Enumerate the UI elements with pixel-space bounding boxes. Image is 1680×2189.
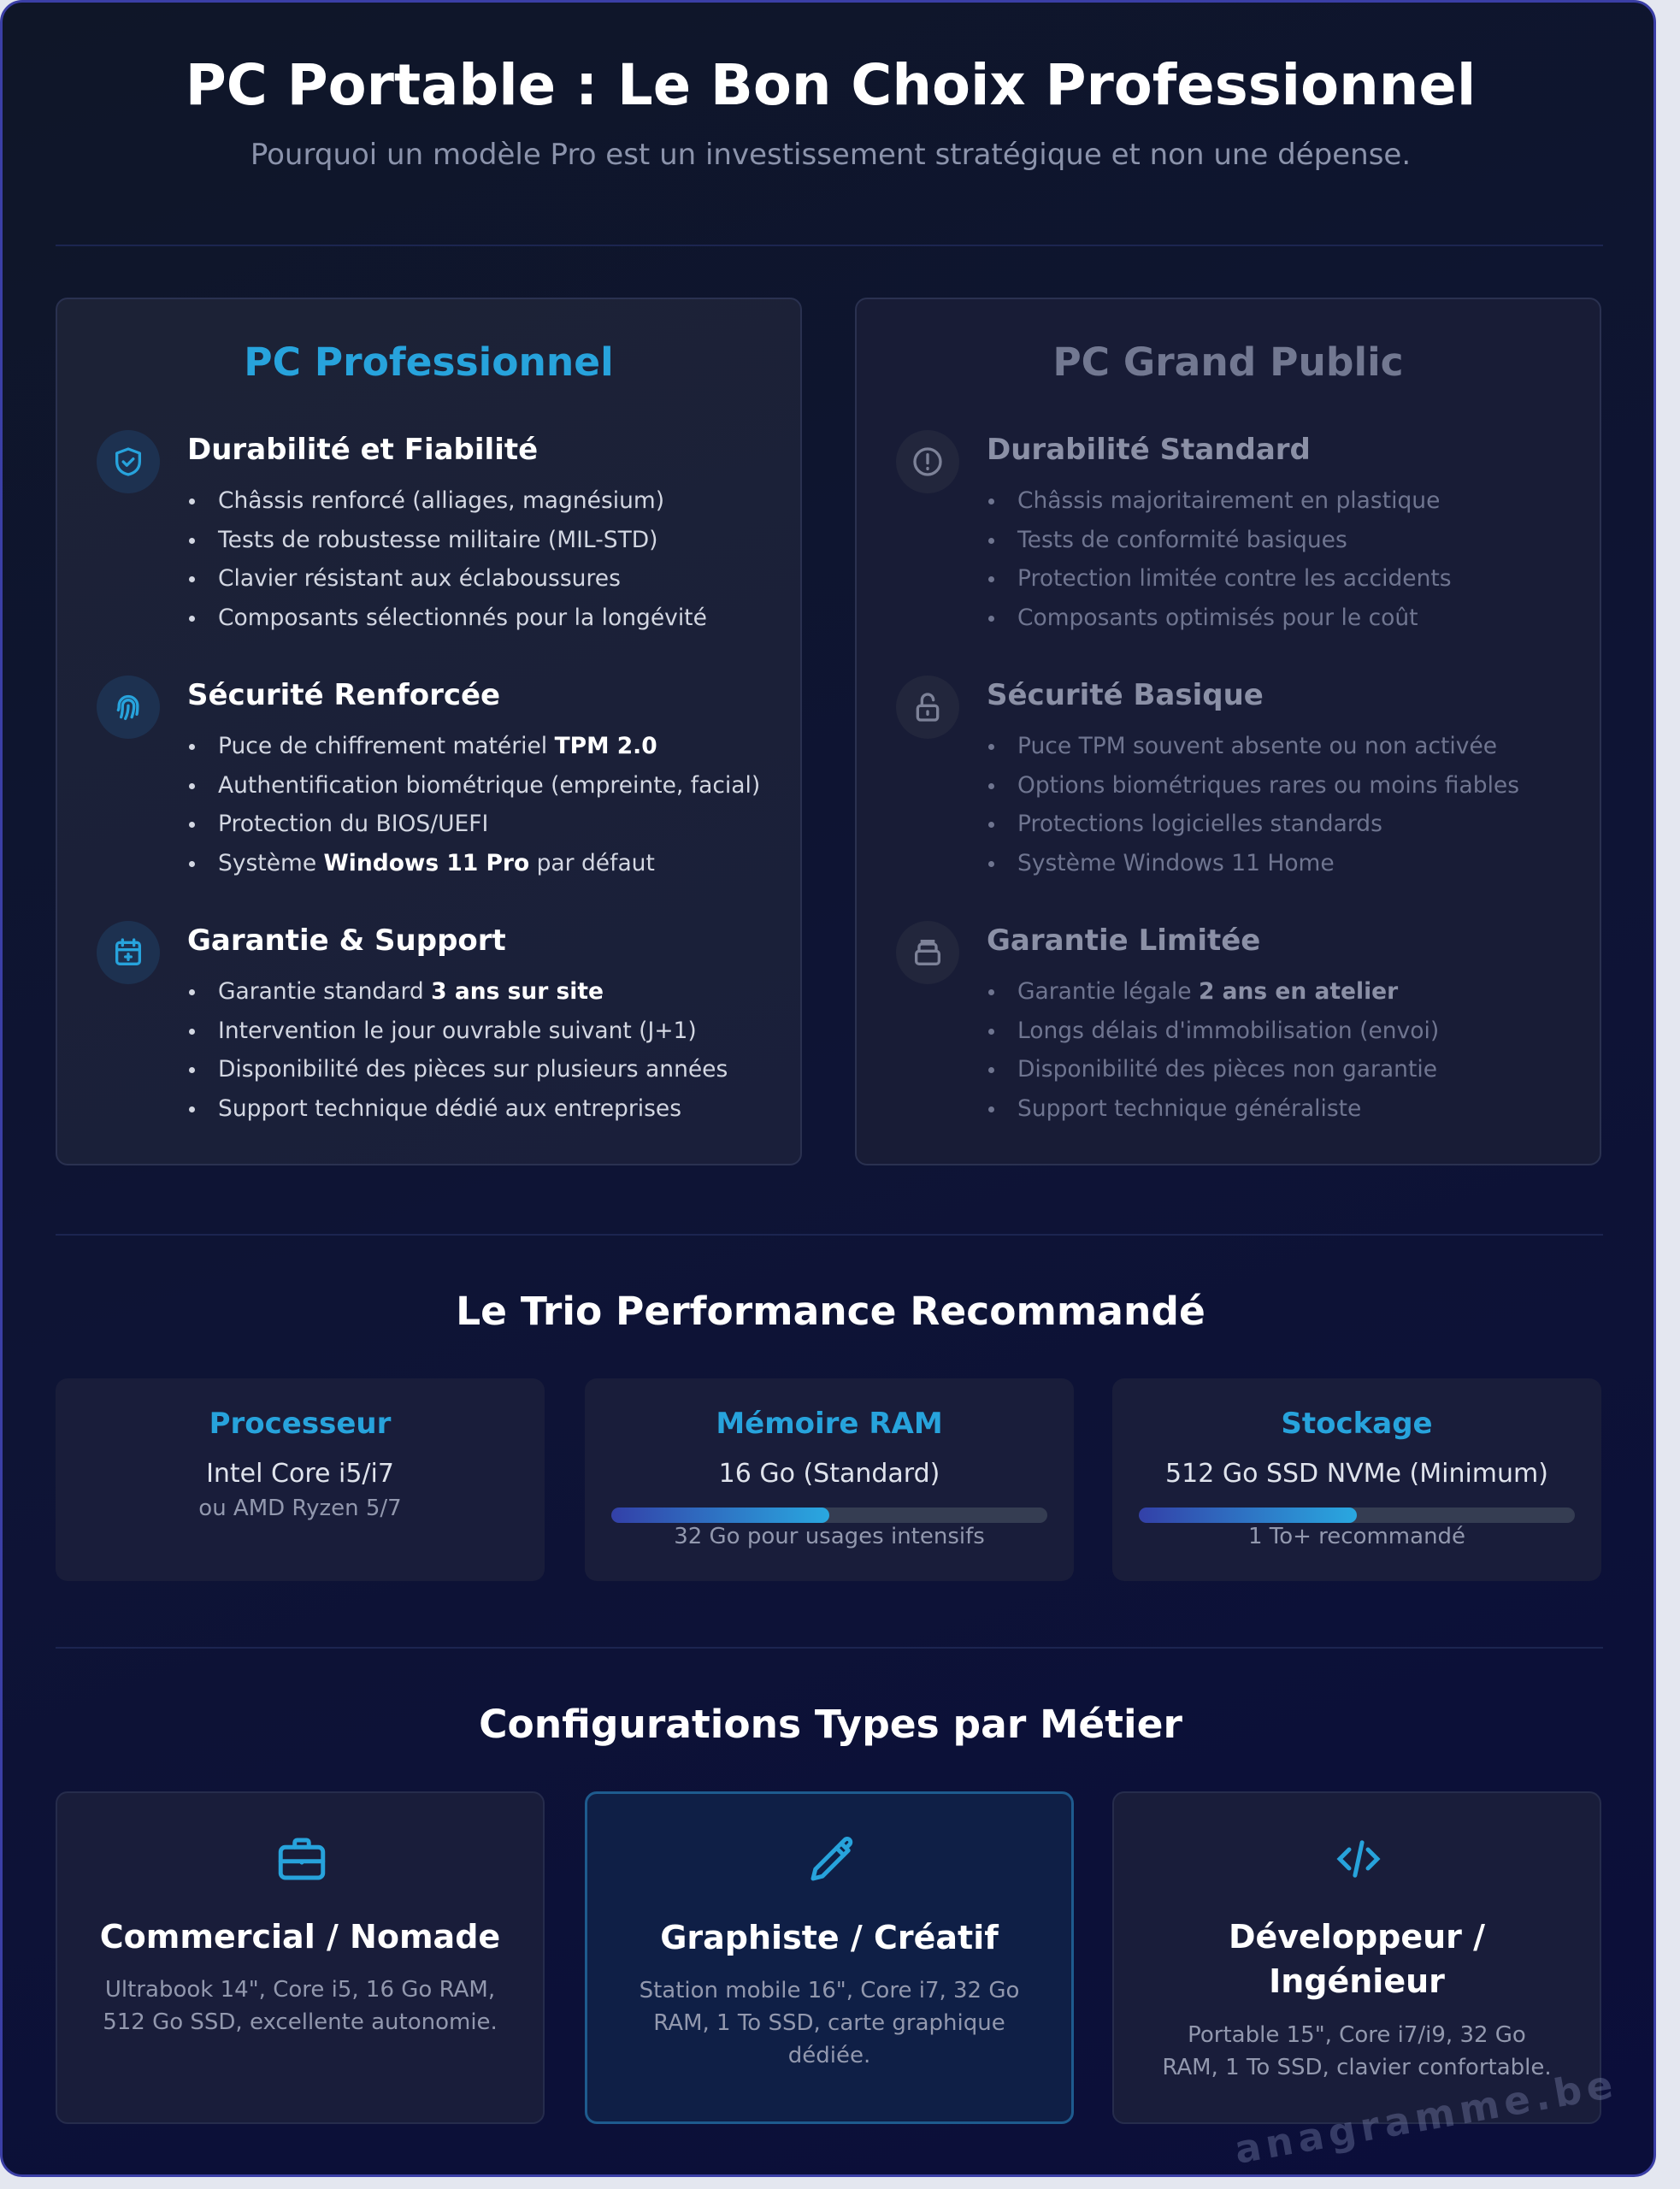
section: durabilité standard [896,430,1452,631]
card: RAM: 32 Go pour usages intensifs [674,1524,985,1549]
bullets: Composants optimisés pour le coût [1017,605,1418,631]
card: développeur: RAM, 1 To SSD, clavier confortable. [1162,2055,1552,2080]
card: RAM: 16 Go (Standard) [719,1459,940,1489]
card: commercial [56,1791,545,2124]
bullets: Puce de chiffrement matériel TPM 2.0 [218,733,657,759]
card: stockage [1112,1378,1601,1581]
section: garantie limitée [896,921,1439,1122]
icon: fingerprint [97,676,160,739]
card: processeur: Processeur [209,1407,391,1441]
title: PC Portable : Le Bon Choix Professionnel [186,53,1476,118]
bullets: Longs délais d'immobilisation (envoi) [1017,1018,1439,1044]
bullets [189,978,728,1122]
bar [1139,1508,1575,1523]
card: processeur: ou AMD Ryzen 5/7 [198,1496,402,1521]
card: RAM: Mémoire RAM [716,1407,943,1441]
bullets [988,733,1519,876]
heading: Garantie Limitée [987,923,1260,958]
bullets: Authentification biométrique (empreinte, facial) [218,772,760,799]
heading: Durabilité Standard [987,433,1311,467]
bullets: Garantie légale 2 ans en atelier [1017,978,1398,1005]
card: commercial: Ultrabook 14", Core i5, 16 Go RAM, 512 Go SSD, excellente autonomie. [103,1977,498,2035]
heading: Garantie & Support [187,923,506,958]
bullets [988,487,1452,631]
heading: Durabilité et Fiabilité [187,433,538,467]
watermark: anagramme.be [1231,2061,1621,2173]
card: stockage: 512 Go SSD NVMe (Minimum) [1165,1459,1548,1489]
bullets: Disponibilité des pièces sur plusieurs années [218,1056,728,1083]
bullets [988,978,1439,1122]
icon: calendar [97,921,160,984]
bullets [189,733,760,876]
subtitle: Pourquoi un modèle Pro est un investissement stratégique et non une dépense. [251,138,1411,172]
card: graphiste [585,1791,1074,2124]
card: commercial: Commercial / Nomade [100,1918,500,1956]
card: développeur: Portable 15", Core i7/i9, 32 Go [1188,2022,1526,2048]
bullets: Tests de conformité basiques [1017,527,1347,553]
icon: box [896,921,959,984]
panel title: PC Grand Public [1052,339,1404,385]
bullets: Intervention le jour ouvrable suivant (J+1) [218,1018,697,1044]
heading: trio: Le Trio Performance Recommandé [456,1289,1205,1334]
section: garantie [97,921,728,1122]
bullets: Composants sélectionnés pour la longévité [218,605,707,631]
heading: Sécurité Basique [987,678,1264,712]
bullets: Puce TPM souvent absente ou non activée [1017,733,1497,759]
section: sécurité basique [896,676,1519,876]
bullets: Options biométriques rares ou moins fiables [1017,772,1519,799]
card: stockage: 1 To+ recommandé [1248,1524,1465,1549]
bullets: Système Windows 11 Pro par défaut [218,850,655,876]
bullets: Tests de robustesse militaire (MIL-STD) [218,527,658,553]
card: développeur: Développeur / Ingénieur [1229,1918,1485,2000]
bullets: Support technique généraliste [1017,1095,1361,1122]
bullets: Disponibilité des pièces non garantie [1017,1056,1437,1083]
bullets: Protection limitée contre les accidents [1017,565,1452,592]
card: graphiste: Station mobile 16", Core i7, 32 Go RAM, 1 To SSD, carte graphique dédiée. [640,1978,1019,2068]
bullets: Clavier résistant aux éclaboussures [218,565,621,592]
bullets: Châssis majoritairement en plastique [1017,487,1440,514]
card: graphiste: Graphiste / Créatif [660,1919,999,1956]
section: durabilité [97,430,707,631]
card: RAM [585,1378,1074,1581]
card: processeur [56,1378,545,1581]
icon: alert [896,430,959,493]
bullets [189,487,707,631]
icon: briefcase [279,1838,325,1879]
heading: configurations: Configurations Types par Métier [479,1702,1182,1747]
card: processeur: Intel Core i5/i7 [206,1459,394,1489]
bullets: Châssis renforcé (alliages, magnésium) [218,487,664,514]
bullets: Garantie standard 3 ans sur site [218,978,604,1005]
panel: PC Professionnel [56,298,802,1165]
bullets: Système Windows 11 Home [1017,850,1335,876]
panel: PC Grand Public [855,298,1601,1165]
bullets: Protection du BIOS/UEFI [218,811,488,837]
bullets: Support technique dédié aux entreprises [218,1095,681,1122]
panel title: PC Professionnel [244,339,614,385]
card: stockage: Stockage [1281,1407,1433,1441]
card: développeur [1112,1791,1601,2124]
icon: pencil [811,1837,853,1881]
icon: code [1337,1840,1380,1878]
section: sécurité [97,676,760,876]
bar [611,1508,1047,1523]
icon: shield [97,430,160,493]
bullets: Protections logicielles standards [1017,811,1382,837]
icon: open lock [896,676,959,739]
heading: Sécurité Renforcée [187,678,500,712]
